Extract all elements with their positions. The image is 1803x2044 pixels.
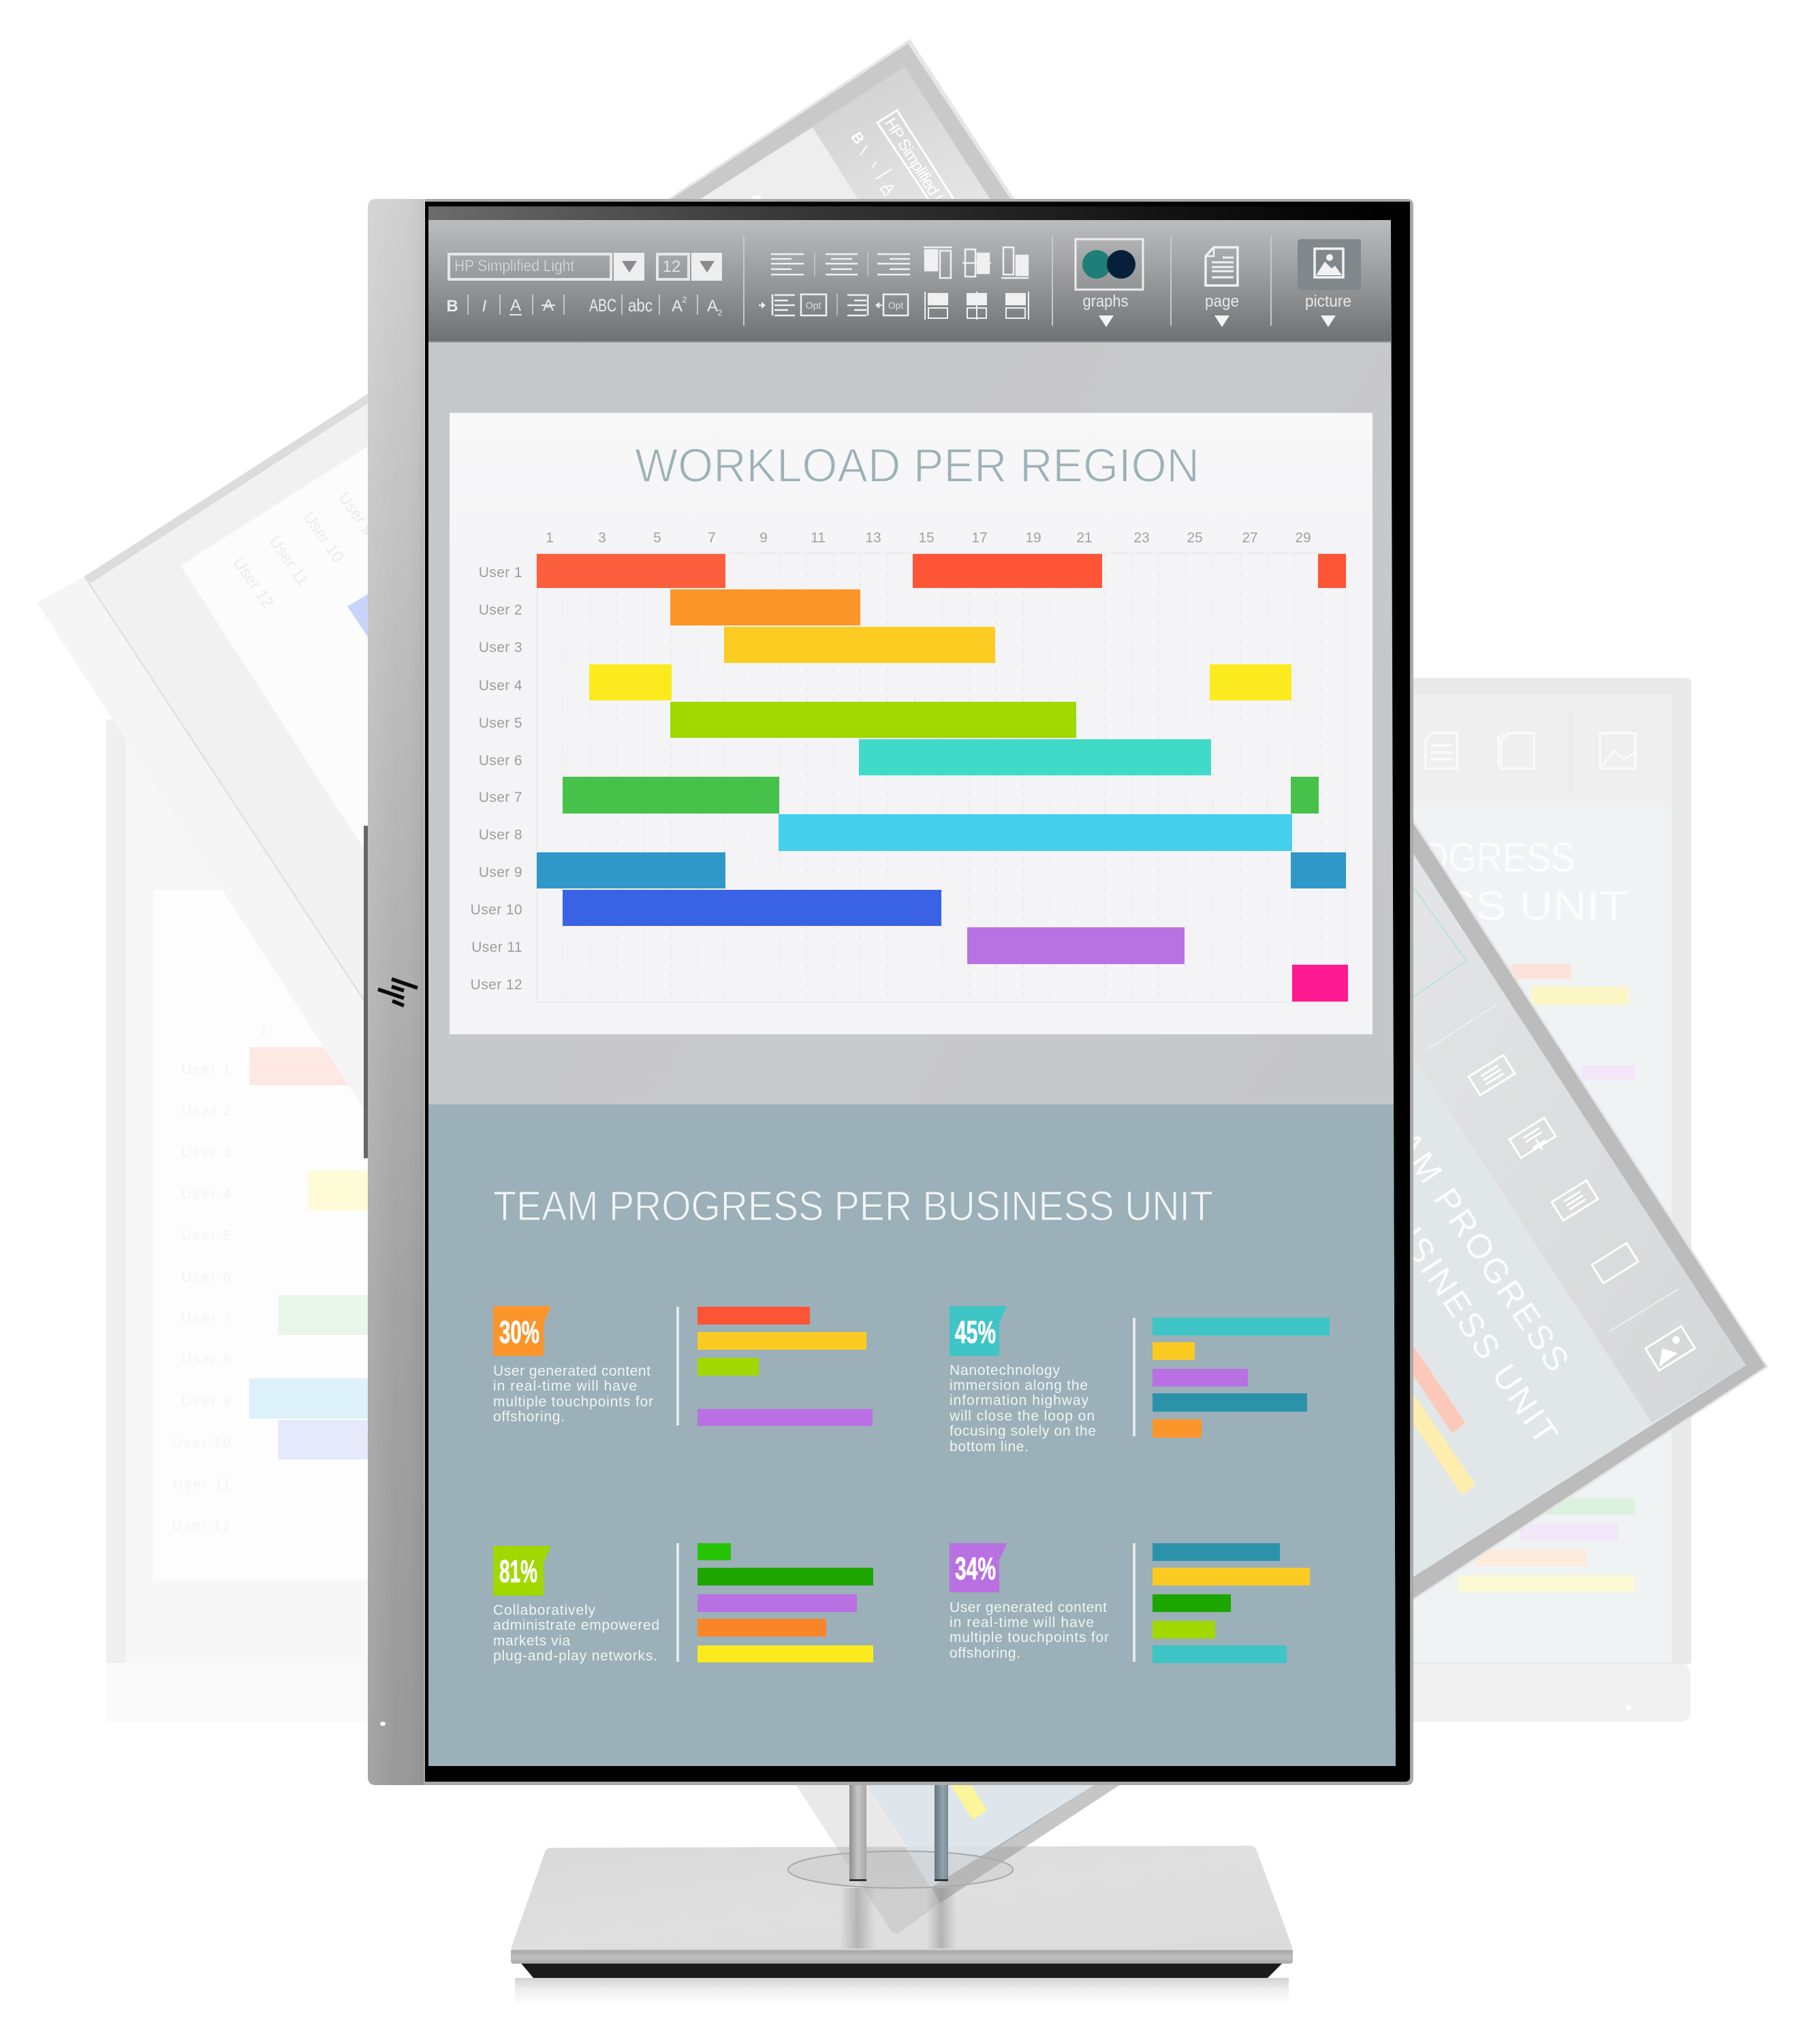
chart: gantt grid and bars [471, 530, 1348, 1002]
axis numbers: 21 [1076, 530, 1093, 546]
icon: text wrap [759, 294, 908, 315]
axis numbers: 23 [1133, 530, 1150, 546]
font selector: HP Simplified Light [454, 257, 574, 275]
ghost monitor: upright left part: User 3 [181, 1145, 232, 1160]
ghost monitor: upright left part: User 6 [181, 1270, 232, 1285]
font selector [449, 253, 722, 281]
stand base [511, 1846, 1293, 2005]
icon: graphs button: graphs [1083, 292, 1128, 311]
text format controls: B [446, 297, 458, 315]
icon: picture button: picture [1305, 292, 1351, 311]
row labels: User 5 [479, 715, 522, 731]
icon: text wrap: Opt [806, 300, 821, 311]
text format controls: abc [628, 295, 653, 315]
card: 45%: immersion along the [950, 1378, 1088, 1393]
card: 30%: 30% [499, 1314, 539, 1350]
text format controls: A [543, 296, 554, 315]
toolbar dividers [744, 236, 1271, 326]
icon: text alignment [771, 254, 910, 275]
text format controls [446, 294, 723, 318]
axis numbers: 19 [1025, 530, 1041, 546]
axis numbers: 1 [546, 530, 554, 546]
font selector: 12 [663, 258, 680, 276]
ghost monitor: upright left part: User 11 [173, 1477, 232, 1492]
text format controls: A [707, 297, 718, 315]
ghost monitor: upright left part: User 4 [181, 1187, 232, 1202]
card: 34%: User generated content [950, 1600, 1107, 1615]
card: 45%: Nanotechnology [950, 1363, 1060, 1378]
row labels: User 4 [479, 678, 522, 694]
axis numbers: 9 [759, 530, 768, 546]
ghost monitor: rotated right [1361, 743, 1767, 1633]
text format controls: 2 [683, 295, 687, 305]
panel: workload per region [450, 413, 1373, 1034]
ghost monitor: upright left part: User 2 [181, 1104, 232, 1119]
panel: team progress [428, 1104, 1396, 1766]
axis numbers [546, 530, 1311, 546]
row labels: User 10 [471, 902, 522, 918]
ghost monitor: upright left part: User 10 [172, 1436, 232, 1451]
card: 34%: offshoring. [950, 1645, 1020, 1661]
row labels: User 12 [471, 977, 522, 993]
row labels [471, 565, 522, 993]
ghost monitor: rotated top: B [848, 129, 868, 147]
card: 81%: markets via [493, 1633, 570, 1649]
card: 30%: multiple touchpoints for [493, 1394, 653, 1410]
icon: object alignment [924, 247, 1029, 278]
card: 81% [493, 1543, 873, 1664]
text format controls: A [672, 297, 683, 315]
toolbar [428, 220, 1391, 343]
text format controls: I [482, 297, 487, 315]
card: 45%: bottom line. [950, 1439, 1029, 1455]
row labels: User 6 [479, 753, 522, 769]
icon: power LED [380, 1722, 386, 1726]
axis numbers: 13 [865, 530, 881, 546]
row labels: User 11 [471, 940, 522, 955]
axis numbers: 27 [1242, 530, 1258, 546]
axis numbers: 7 [708, 530, 716, 546]
stand: ghost reflections and poles [788, 1784, 1120, 1934]
panel: left silver strip [368, 199, 425, 1785]
axis numbers: 15 [918, 530, 935, 546]
text format controls: ABC [589, 295, 616, 315]
axis numbers: 17 [971, 530, 988, 546]
card: 81%: Collaboratively [493, 1602, 595, 1618]
icon: text wrap: Opt [888, 300, 903, 311]
card: 45%: will close the loop on [949, 1408, 1095, 1424]
axis numbers: 5 [653, 530, 661, 546]
ghost monitor: upright left part: User 5 [181, 1228, 232, 1243]
ghost monitor: upright right part: ESS UNIT [1413, 883, 1628, 929]
card: 81%: administrate empowered [493, 1617, 659, 1633]
ghost monitor: rotated right: TEAM PROGRESS [1361, 1083, 1578, 1380]
screen [428, 220, 1396, 1766]
ghost monitor: upright right part [1403, 678, 1691, 1722]
ghost monitor: rotated top: A [879, 179, 899, 197]
text format controls: 2 [718, 308, 723, 318]
monitor body [364, 199, 1413, 1785]
ghost monitor: upright left part [106, 719, 369, 1722]
card: 45% [949, 1306, 1330, 1455]
ghost monitor: upright left part: User 12 [172, 1519, 232, 1534]
row labels: User 2 [479, 602, 522, 618]
icon: back nub [364, 826, 369, 1158]
card: 30%: offshoring. [493, 1409, 565, 1425]
card: 30% [493, 1306, 873, 1426]
ghost monitor: rotated left: User 12 [229, 554, 277, 611]
icon: rotated toolbar icons [1469, 1055, 1695, 1371]
row labels: User 8 [479, 827, 522, 843]
card: 30%: User generated content [493, 1363, 650, 1379]
ghost monitor: rotated left [37, 394, 377, 1115]
icon: graphs button [1076, 239, 1143, 327]
axis numbers: 25 [1187, 530, 1203, 546]
card: 45%: 45% [955, 1314, 996, 1350]
ghost monitor: upright left part: User 8 [181, 1352, 232, 1367]
axis numbers: 11 [811, 530, 826, 546]
card: 34% [950, 1543, 1310, 1663]
text format controls: A [510, 296, 521, 315]
icon: HP logo [378, 979, 418, 1006]
card: 45%: information highway [950, 1393, 1088, 1408]
panel: outer silver edge and black bezel [425, 199, 1413, 1785]
ghost monitor: upright left part: 1 [260, 1023, 268, 1038]
icon: page button: page [1205, 292, 1239, 311]
ghost monitor: rotated top: HP Simplified Light [881, 115, 961, 229]
ghost monitor: rotated left: User 9 [334, 489, 377, 539]
row labels: User 1 [479, 565, 522, 580]
ghost monitor: upright left part: User 9 [181, 1394, 232, 1409]
row labels: User 9 [479, 865, 522, 880]
ghost monitor: upright right part: OGRESS [1420, 835, 1575, 880]
heading: workload per region: WORKLOAD PER REGION [635, 439, 1200, 492]
icon: picture button [1298, 239, 1361, 327]
ghost monitor: upright left part: User 7 [181, 1311, 232, 1326]
bars [537, 554, 1348, 1002]
card: 81%: 81% [499, 1553, 537, 1589]
icon: distribute objects [925, 292, 1029, 320]
axis numbers: 29 [1295, 530, 1311, 546]
card: 45%: focusing solely on the [950, 1423, 1096, 1439]
ghost monitor: rotated top [663, 39, 1016, 229]
axis numbers: 3 [598, 530, 606, 546]
ghost monitor: upright left part: User 1 [181, 1062, 232, 1077]
card: 81%: plug-and-play networks. [493, 1648, 657, 1664]
heading: team progress: TEAM PROGRESS PER BUSINESS UNIT [493, 1183, 1213, 1229]
icon: page button [1205, 247, 1239, 327]
card: 34%: multiple touchpoints for [950, 1630, 1109, 1645]
ghost monitor: rotated left: User 10 [299, 508, 347, 566]
card: 30%: in real-time will have [493, 1378, 637, 1394]
row labels: User 3 [479, 640, 522, 655]
ghost monitor: rotated left: User 11 [265, 533, 312, 589]
card: 34%: 34% [955, 1551, 996, 1586]
row labels: User 7 [479, 790, 522, 805]
ghost monitor: rotated right: BUSINESS UNIT [1369, 1186, 1567, 1453]
card: 34%: in real-time will have [950, 1615, 1094, 1630]
